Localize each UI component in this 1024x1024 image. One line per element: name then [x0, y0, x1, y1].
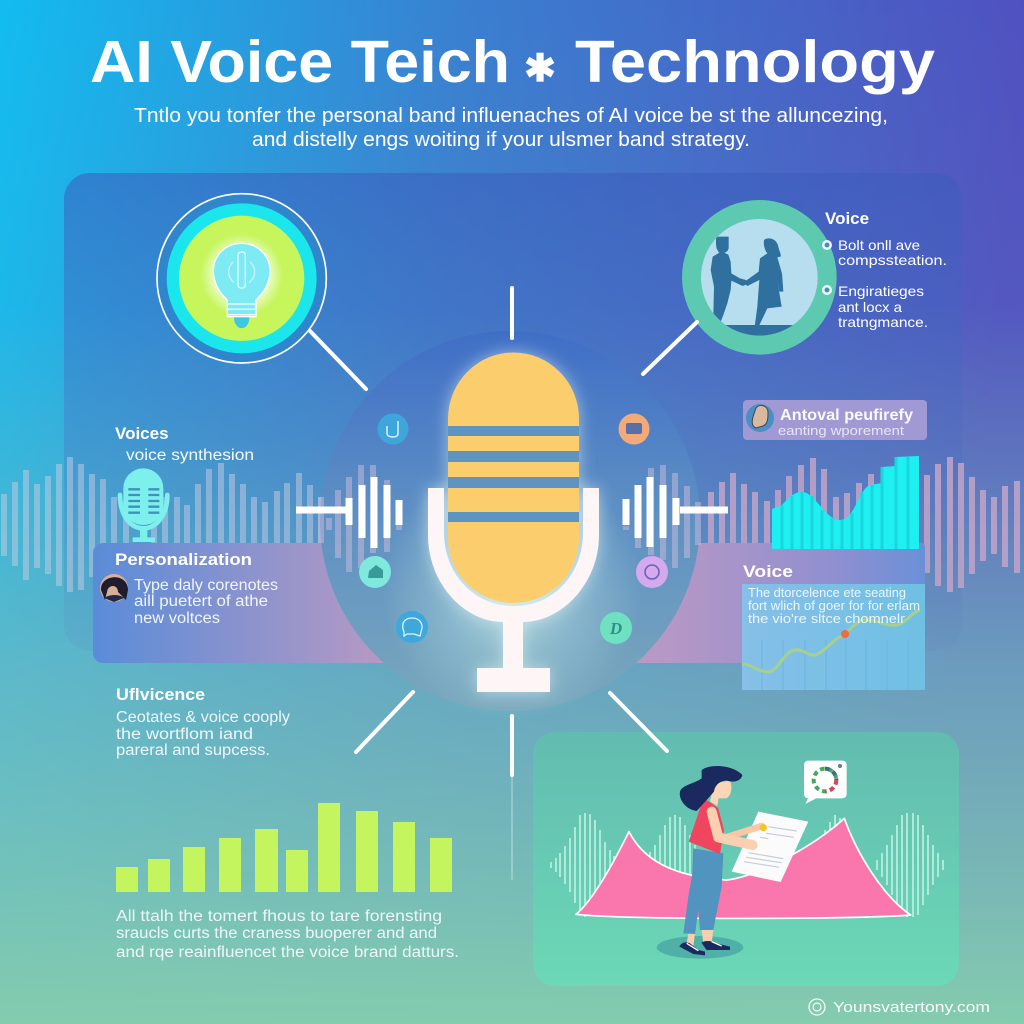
influence text block — [116, 685, 290, 759]
voice text block: ant locx a — [838, 299, 902, 315]
voices text block: voice synthesion — [126, 447, 254, 464]
bottom text block: and rqe reainfluencet the voice brand datturs. — [116, 944, 459, 961]
subtitle — [134, 105, 888, 151]
influence text block: Uflvicence — [116, 685, 205, 704]
bar chart — [116, 803, 452, 892]
thin ray tail — [511, 775, 513, 880]
speech bubble — [804, 761, 847, 804]
area chart: cyan — [772, 456, 919, 549]
watermark: Younsvatertony.com — [833, 999, 990, 1016]
influence text block: Ceotates & voice cooply — [116, 709, 290, 726]
center glow — [382, 460, 642, 720]
central circle — [320, 331, 700, 711]
icon: handshake badge — [682, 200, 837, 355]
bottom text block: sraucls curts the craness buoperer and and — [116, 925, 437, 942]
icon: teal badge — [359, 556, 391, 588]
arrow: handshake connector — [643, 322, 697, 374]
voices text block: Voices — [115, 424, 169, 443]
voice text block: Voice — [825, 209, 869, 228]
personalization text — [100, 550, 278, 627]
woman — [657, 766, 808, 959]
voice text block: Bolt onll ave — [838, 237, 920, 253]
title: AI Voice Teich — [90, 29, 510, 95]
voice chart card — [742, 562, 925, 690]
icon: chat badge — [396, 611, 428, 643]
influence text block: the wortflom iand — [116, 726, 253, 743]
microphone stand — [428, 488, 599, 692]
personalization text: new voltces — [134, 610, 220, 627]
subtitle: Tntlo you tonfer the personal band influenaches of AI voice be st the alluncezing, — [134, 105, 888, 127]
faint wave right — [626, 465, 698, 568]
voice text block — [822, 209, 947, 330]
waveform: right — [711, 457, 1017, 592]
voice text block: Engiratieges — [838, 283, 924, 299]
title: Technology — [575, 29, 935, 95]
title: ✱ — [524, 48, 556, 90]
white wave left — [296, 477, 399, 548]
mic halo — [428, 352, 599, 692]
voice chart card: the vio're sltce chomnelr — [748, 612, 905, 626]
panel: illustration — [533, 732, 959, 986]
icon: letter badge: D — [609, 619, 622, 638]
icon: lightbulb badge — [157, 194, 326, 363]
voice chart card: Voice — [743, 562, 793, 581]
white wave right — [626, 477, 728, 547]
callout tag: eanting wporement — [778, 423, 904, 438]
panel: main backdrop — [64, 173, 962, 651]
panel: personalization background — [93, 543, 413, 663]
avatar — [100, 574, 128, 602]
personalization text: aill puetert of athe — [134, 593, 268, 610]
title — [90, 29, 935, 95]
subtitle: and distelly engs woiting if your ulsmer band strategy. — [252, 129, 750, 151]
line chart — [742, 610, 920, 672]
panel: voice chart background — [620, 543, 925, 663]
personalization text: Personalization — [115, 550, 252, 569]
icon: music badge — [378, 414, 408, 444]
voice text block: compssteation. — [838, 252, 947, 268]
rays — [356, 288, 667, 775]
personalization text: Type daly corenotes — [134, 577, 278, 594]
callout tag — [743, 400, 927, 440]
voice chart card: The dtorcelence ete seating — [748, 586, 906, 600]
arrow: bulb connector — [310, 331, 366, 389]
bottom text block — [116, 908, 459, 961]
bottom text block: All ttalh the tomert fhous to tare forensting — [116, 908, 442, 925]
icon: purple badge — [636, 556, 668, 588]
faint wave left — [321, 465, 399, 572]
microphone capsule — [448, 352, 579, 603]
voice chart card: fort wlich of goer for for erlam — [748, 599, 920, 613]
microphone capsule gaps — [448, 426, 579, 522]
panel: central microphone — [296, 331, 728, 720]
icon: screen badge — [618, 414, 650, 444]
panel waves — [551, 813, 943, 917]
icon: cyan microphone — [120, 468, 167, 542]
icon: letter badge — [600, 612, 632, 644]
callout tag: Antoval peufirefy — [780, 407, 913, 424]
voices text block — [115, 424, 254, 464]
influence text block: pareral and supcess. — [116, 742, 270, 759]
waveform: left — [4, 457, 321, 592]
pink mountain — [576, 818, 911, 918]
voice text block: tratngmance. — [838, 314, 928, 330]
